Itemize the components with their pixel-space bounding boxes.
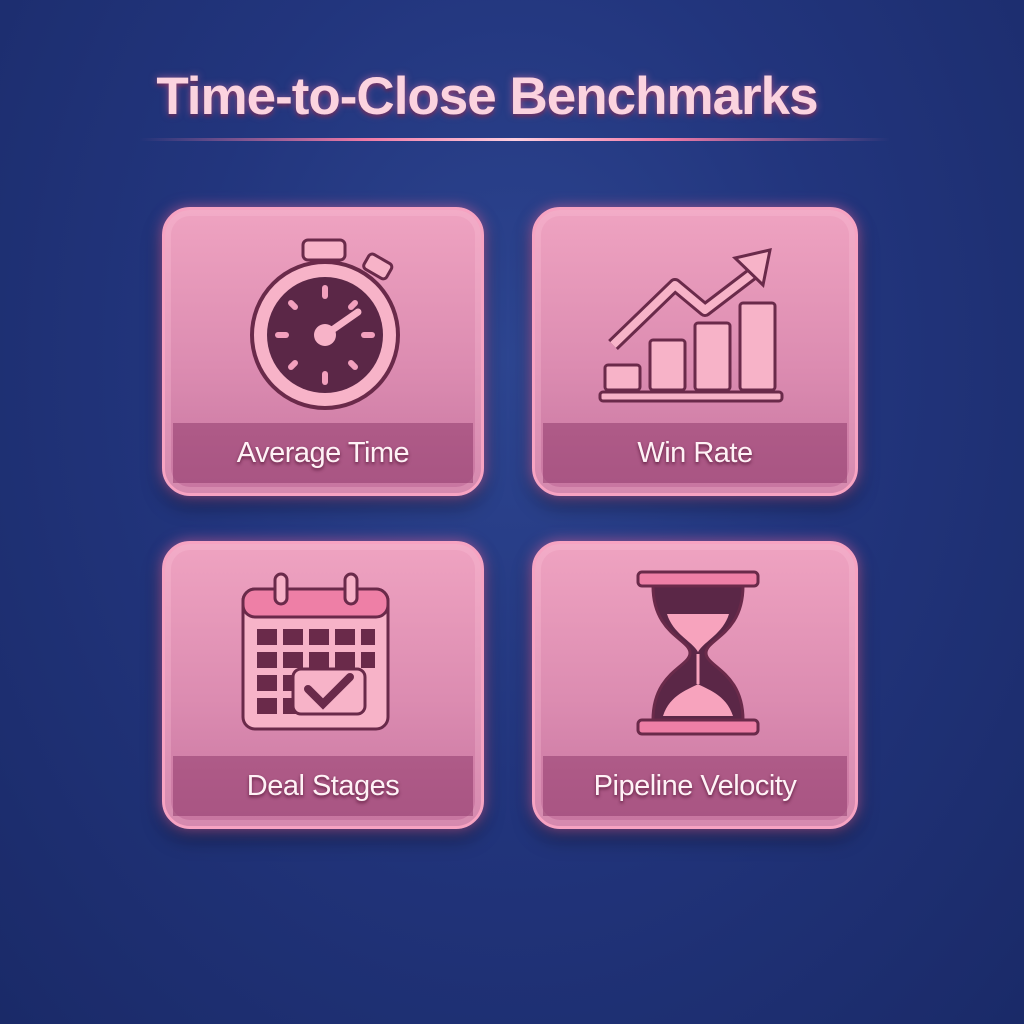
icon: stopwatch: [250, 238, 400, 410]
title: Time-to-Close Benchmarks: [156, 67, 818, 126]
icon: calendar: [242, 572, 390, 730]
icon: growth chart: [598, 248, 784, 402]
label: [543, 756, 847, 816]
icon: hourglass: [636, 570, 760, 736]
panel: win rate: [532, 207, 858, 496]
label: Deal Stages: [247, 770, 399, 802]
panel: average time: [162, 207, 484, 496]
label: Average Time: [237, 436, 409, 468]
label: Pipeline Velocity: [594, 770, 796, 802]
label: [173, 423, 473, 483]
label: [173, 756, 473, 816]
panel: pipeline velocity: [532, 541, 858, 829]
panel: deal stages: [162, 541, 484, 829]
label: Win Rate: [637, 436, 753, 468]
label: [543, 423, 847, 483]
